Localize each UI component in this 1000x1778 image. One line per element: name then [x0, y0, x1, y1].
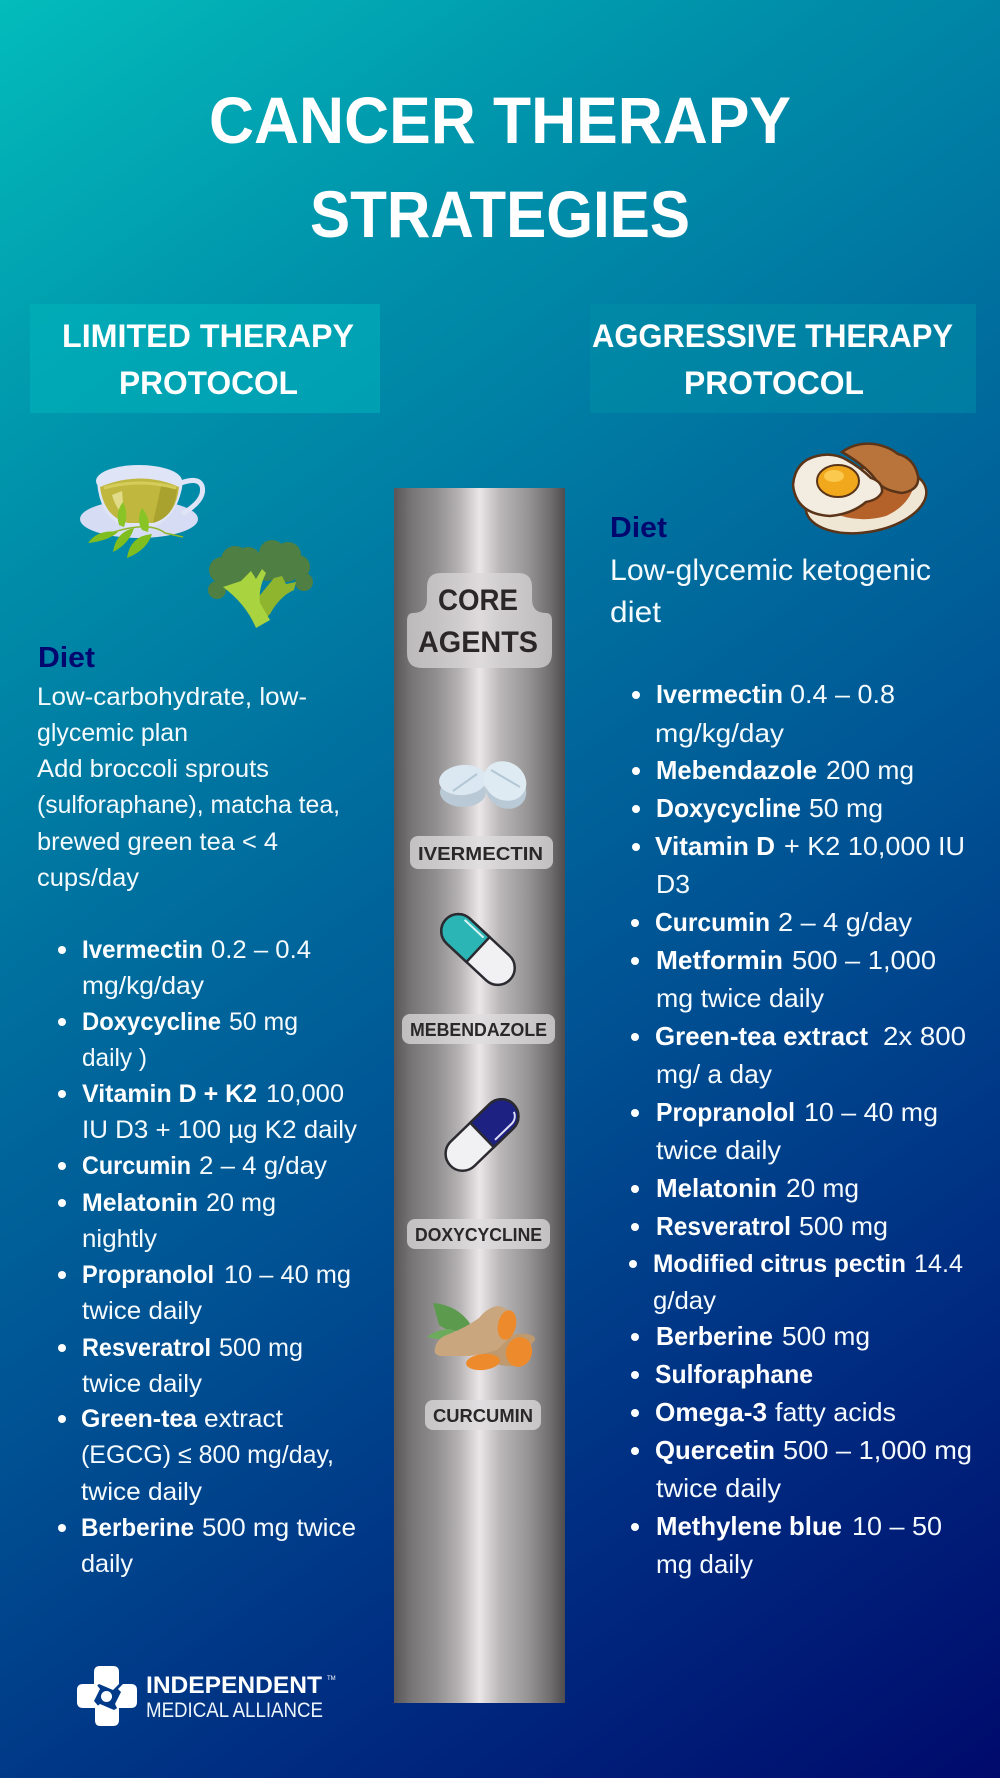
text block: aggressive protocol diet [610, 512, 931, 629]
list: limited therapy agents: Ivermectin [82, 936, 203, 964]
list: aggressive therapy agents: Mebendazole [656, 755, 817, 785]
panel heading: limited therapy protocol: PROTOCOL [119, 365, 298, 401]
list: aggressive therapy agents: 2 – 4 g/day [778, 907, 912, 937]
core agents plaque [407, 573, 552, 668]
panel: core agents pillar [394, 488, 565, 1703]
core agents plaque: CORE [438, 584, 518, 617]
list: aggressive therapy agents: 0.4 – 0.8 [790, 679, 895, 709]
list: limited therapy agents: 50 mg [229, 1008, 298, 1036]
title: STRATEGIES [310, 177, 690, 251]
label: curcumin [425, 1400, 541, 1430]
label: curcumin: CURCUMIN [433, 1405, 533, 1426]
list: aggressive therapy agents: Omega-3 [655, 1397, 767, 1427]
list: aggressive therapy agents: 500 mg [782, 1321, 870, 1351]
text block: limited protocol diet: Diet [38, 642, 95, 674]
list: limited therapy agents: Melatonin [82, 1189, 198, 1217]
panel heading: limited therapy protocol [30, 304, 380, 413]
list: limited therapy agents: 2 – 4 g/day [199, 1152, 328, 1180]
list: limited therapy agents: 500 mg [219, 1334, 303, 1362]
logo: independent medical alliance: MEDICAL ALLIANCE [146, 1699, 323, 1722]
list: limited therapy agents: IU D3 + 100 µg K2 daily [82, 1116, 358, 1144]
list: aggressive therapy agents: 2x 800 [883, 1021, 966, 1051]
list: limited therapy agents: 500 mg twice [202, 1514, 356, 1542]
list: aggressive therapy agents: Metformin [656, 945, 783, 975]
label: doxycycline: DOXYCYCLINE [415, 1224, 542, 1245]
list: aggressive therapy agents: 200 mg [826, 755, 914, 785]
list: aggressive therapy agents: 500 – 1,000 mg [783, 1435, 972, 1465]
list: aggressive therapy agents: fatty acids [775, 1397, 896, 1427]
list: aggressive therapy agents: mg/ a day [656, 1059, 772, 1089]
list: limited therapy agents: Vitamin D + K2 [82, 1080, 257, 1108]
list: limited therapy agents: (EGCG) ≤ 800 mg/day, [81, 1441, 334, 1469]
list: limited therapy agents: Berberine [81, 1514, 194, 1542]
text block: limited protocol diet [37, 642, 340, 892]
list: limited therapy agents: Curcumin [82, 1152, 191, 1180]
icon: doxycycline capsule [439, 1092, 525, 1178]
panel heading: aggressive therapy protocol: AGGRESSIVE THERAPY [592, 318, 953, 354]
icon: egg and patty plate [793, 444, 932, 542]
list: aggressive therapy agents: Ivermectin [656, 679, 783, 709]
list: aggressive therapy agents: Propranolol [656, 1097, 795, 1127]
icon: turmeric root [427, 1303, 535, 1372]
title [209, 83, 791, 251]
list: aggressive therapy agents: Green-tea extract [655, 1021, 868, 1051]
panel heading: aggressive therapy protocol: PROTOCOL [684, 365, 864, 401]
text block: limited protocol diet: Low-carbohydrate, low- [37, 683, 307, 711]
logo: independent medical alliance [77, 1666, 336, 1726]
list: aggressive therapy agents: 20 mg [786, 1173, 859, 1203]
list: aggressive therapy agents: Resveratrol [656, 1211, 791, 1241]
list: aggressive therapy agents: 50 mg [809, 793, 883, 823]
label: mebendazole: MEBENDAZOLE [410, 1019, 547, 1040]
list: aggressive therapy agents: Methylene blue [656, 1511, 842, 1541]
list: aggressive therapy agents: Berberine [656, 1321, 773, 1351]
list: limited therapy agents: 0.2 – 0.4 [211, 936, 311, 964]
list: limited therapy agents: twice daily [81, 1478, 203, 1506]
list: aggressive therapy agents: mg daily [656, 1549, 753, 1579]
icon: mebendazole capsule [434, 907, 522, 992]
label: mebendazole [402, 1014, 555, 1044]
list: limited therapy agents: Resveratrol [82, 1334, 211, 1362]
list: limited therapy agents: 10 – 40 mg [224, 1261, 351, 1289]
text block: limited protocol diet: (sulforaphane), matcha tea, [37, 791, 340, 819]
list: limited therapy agents: mg/kg/day [82, 972, 205, 1000]
list: aggressive therapy agents: Quercetin [655, 1435, 775, 1465]
label: doxycycline [407, 1219, 550, 1249]
list: aggressive therapy agents: Melatonin [656, 1173, 777, 1203]
list: aggressive therapy agents: + K2 10,000 IU [784, 831, 965, 861]
list: aggressive therapy agents: D3 [656, 869, 690, 899]
list: aggressive therapy agents: 500 mg [799, 1211, 888, 1241]
logo: independent medical alliance: INDEPENDENT [146, 1672, 322, 1699]
list: aggressive therapy agents: Modified citrus pectin [653, 1250, 906, 1278]
list: aggressive therapy agents: Sulforaphane [655, 1359, 813, 1389]
list: limited therapy agents [58, 936, 358, 1578]
text block: aggressive protocol diet: Diet [610, 512, 667, 544]
panel heading: aggressive therapy protocol [590, 304, 976, 413]
label: ivermectin: IVERMECTIN [418, 843, 543, 864]
list: aggressive therapy agents: twice daily [656, 1473, 781, 1503]
list: limited therapy agents: daily ) [82, 1044, 147, 1072]
title: CANCER THERAPY [209, 83, 791, 157]
list: limited therapy agents: twice daily [82, 1297, 203, 1325]
list: limited therapy agents: Green-tea [81, 1405, 198, 1433]
icon: broccoli [208, 540, 313, 628]
text block: aggressive protocol diet: diet [610, 596, 662, 629]
panel heading: limited therapy protocol: LIMITED THERAPY [62, 318, 354, 354]
list: limited therapy agents: 20 mg [206, 1189, 276, 1217]
icon: ivermectin tablets [438, 754, 534, 816]
list: aggressive therapy agents: 14.4 [914, 1250, 963, 1278]
text block: limited protocol diet: Add broccoli sprouts [37, 755, 269, 783]
text block: limited protocol diet: brewed green tea < 4 [37, 828, 278, 856]
list: limited therapy agents: nightly [82, 1225, 158, 1253]
text block: aggressive protocol diet: Low-glycemic ketogenic [610, 554, 931, 587]
logo: independent medical alliance: TM [327, 1676, 336, 1682]
list: limited therapy agents: extract [204, 1405, 283, 1433]
list: limited therapy agents: Propranolol [82, 1261, 214, 1289]
text block: limited protocol diet: cups/day [37, 864, 140, 892]
icon: green tea cup [80, 465, 203, 558]
core agents plaque: AGENTS [418, 626, 538, 659]
list: aggressive therapy agents: 500 – 1,000 [792, 945, 936, 975]
label: ivermectin [410, 836, 553, 869]
list: aggressive therapy agents: Curcumin [655, 907, 770, 937]
list: aggressive therapy agents: Doxycycline [656, 793, 801, 823]
list: limited therapy agents: twice daily [82, 1370, 203, 1398]
text block: limited protocol diet: glycemic plan [37, 719, 188, 747]
list: limited therapy agents: daily [81, 1550, 133, 1578]
list: aggressive therapy agents: g/day [653, 1287, 716, 1315]
list: aggressive therapy agents: twice daily [656, 1135, 781, 1165]
list: aggressive therapy agents: mg/kg/day [655, 718, 784, 748]
list: aggressive therapy agents: mg twice daily [656, 983, 824, 1013]
list: aggressive therapy agents: Vitamin D [655, 831, 775, 861]
list: aggressive therapy agents: 10 – 50 [852, 1511, 942, 1541]
list: aggressive therapy agents: 10 – 40 mg [804, 1097, 938, 1127]
list: limited therapy agents: 10,000 [266, 1080, 344, 1108]
list: aggressive therapy agents [629, 679, 972, 1579]
list: limited therapy agents: Doxycycline [82, 1008, 221, 1036]
icon: logo cross [77, 1666, 137, 1726]
